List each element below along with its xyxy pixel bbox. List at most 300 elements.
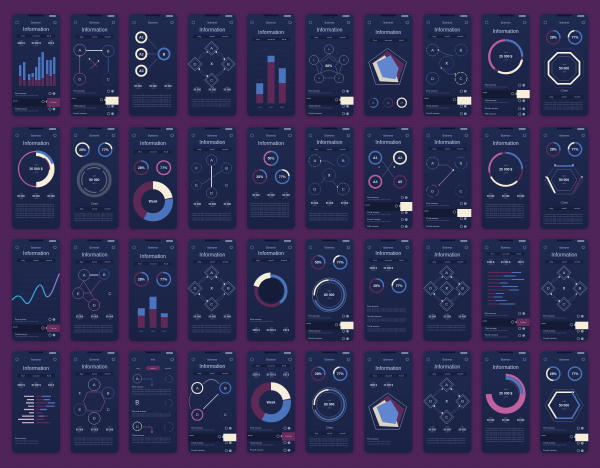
text rows: Lorem ipsum dolor sit amet consectetur adipiscing elit sed [367,328,406,330]
paragraph: Lorem ipsum dolor sit amet consectetur adipiscing elit sed [485,438,524,441]
paragraph: Lorem ipsum dolor sit amet consectetur adipiscing elit sed [485,440,524,443]
stats: + 88 % [371,270,376,272]
stats: 50 000 $ [384,267,394,270]
tabs [310,148,348,151]
paragraph: Lorem ipsum dolor sit amet consectetur adipiscing elit sed [192,328,230,331]
list: ason [13,326,18,328]
list: Lorem ipsum dolor sit amet consec [15,320,39,323]
diamond diagram: A [445,382,448,387]
tabs: day [433,262,437,264]
stats: 100 $ [283,329,290,332]
ring chart: + 28 % [503,397,509,399]
paragraph: Lorem ipsum dolor sit amet consectetur adipiscing elit sed [16,212,54,215]
stats: 50 000 [209,203,217,206]
rings [547,31,582,44]
stats [370,382,394,389]
octagon chart: Label [562,64,567,66]
text row: Lorem ipsum dolor sit amet consec [367,440,391,443]
stats: 10 000 $ [266,329,276,332]
list: Fourth season [74,112,88,115]
caption: Chart [561,200,568,204]
stats [17,193,55,200]
paragraph: Lorem ipsum dolor sit amet consectetur adipiscing elit sed [74,326,113,329]
tabs: month [104,36,111,38]
pentagon diagram: C [338,78,340,80]
tabs [252,259,290,262]
paragraph: Lorem ipsum dolor sit amet consectetur adipiscing elit sed [16,203,54,206]
stats: + 88 % [254,332,259,334]
rings: 77% [102,148,109,152]
paragraph [309,212,348,222]
tabs: week [327,37,333,39]
paragraph: Lorem ipsum dolor sit amet consectetur adipiscing elit sed [485,207,524,210]
caption: Chart [326,426,333,430]
stats: + 28 % [445,432,450,434]
stats: 50 000 [459,428,467,431]
rings: 77% [160,166,167,170]
paragraph: Lorem ipsum dolor sit amet consectetur adipiscing elit sed [132,101,171,104]
diamond diagram: B [579,286,582,291]
tabs: week [92,208,98,210]
paragraph: Lorem ipsum dolor sit amet consectetur adipiscing elit sed [544,222,582,225]
tabs: week [445,148,451,150]
tabs [76,207,114,210]
stats: + 28 % [34,198,39,200]
paragraph: Lorem ipsum dolor sit amet consectetur adipiscing elit sed [544,213,582,216]
hexagon chart: + 88 % [562,183,567,185]
list: Lorem ipsum dolor sit amet consec [485,101,508,104]
list: Fourth season [308,337,323,340]
network diagram: C [107,76,110,82]
list: Lorem ipsum dolor sit amet consec [15,110,39,112]
phone: rings with text rows [364,239,413,342]
heading: Information [199,28,225,34]
octagon chart: 50 000 [559,66,569,70]
tabs [193,372,231,375]
stats: 1000 $ [17,384,25,387]
list: First season [543,315,555,318]
stats: + 8 % [108,432,112,434]
stats: + 28 % [386,270,391,272]
stats: Label [254,327,259,329]
list: Lorem ipsum dolor sit amet consec [543,444,567,447]
stats [194,314,232,321]
network diagram: B [460,160,463,166]
phone: ring with cream arc: Business [266,246,277,250]
phone: dial with chart caption [305,351,354,454]
paragraph: Lorem ipsum dolor sit amet consectetur adipiscing elit sed [74,443,113,446]
stats [252,372,290,379]
list: First season [15,92,27,95]
paragraph: Lorem ipsum dolor sit amet consectetur adipiscing elit sed [544,108,582,111]
paragraph: Lorem ipsum dolor sit amet consectetur adipiscing elit sed [132,105,171,108]
stats: + 88 % [19,198,24,200]
list: Lorem ipsum dolor sit amet consec [308,92,332,95]
ring chart [489,153,522,186]
network diagram: C [109,291,112,296]
network diagram: B [224,386,227,390]
stats: + 8 % [49,45,54,47]
stats: 10 000 $ [501,261,511,264]
diamond diagram [188,266,235,311]
stats: 50 000 [429,316,437,318]
paragraph [192,212,230,222]
phone: octagon chart [540,14,589,117]
tabs: month [104,372,111,376]
tabs: day [315,37,319,39]
stats: 50 000 [502,419,510,422]
hexagon diagram: E [78,407,81,412]
phone: rings with dial [305,239,354,342]
list: Third season [543,442,556,445]
list: Lorem ipsum dolor sit amet consec [543,317,567,320]
stats: Label [210,201,215,203]
stats: 50 000 [209,316,217,318]
list: Lorem ipsum dolor sit amet consec [308,317,332,320]
stats [429,314,467,321]
pentagon diagram: D [318,78,320,80]
tabs: day [21,260,26,262]
stats: 100 $ [283,374,290,376]
stats: Label [195,201,200,203]
paragraph: Lorem ipsum dolor sit amet consectetur adipiscing elit sed [74,212,113,216]
paragraph: Lorem ipsum dolor sit amet consectetur adipiscing elit sed [544,220,582,223]
heading: Information [199,140,225,146]
list [306,315,354,340]
stats: + 88 % [430,432,435,434]
list: Lorem ipsum dolor sit amet consec [367,198,391,201]
step C: Third season [132,434,145,437]
paragraph: Lorem ipsum dolor sit amet consectetur adipiscing elit sed [74,439,113,442]
network diagram: A [210,157,213,162]
list: First season [426,202,438,205]
heading: Information [375,251,401,257]
tabs: week [445,36,451,38]
network diagram: D [210,190,213,195]
paragraph: Lorem ipsum dolor sit amet consectetur adipiscing elit sed [309,212,348,215]
paragraph: Lorem ipsum dolor sit amet consectetur adipiscing elit sed [427,439,465,442]
list: ason [248,435,253,437]
phone: line chart: Business [31,246,42,250]
stats: 50 000 [311,202,319,205]
text rows: Second season [367,316,382,318]
list: Lorem ipsum dolor sit amet consec [485,86,508,89]
hexagon chart [545,164,583,194]
ring chart [18,152,54,186]
stats: + 88 % [488,198,494,200]
paragraph [16,203,54,219]
list: Lorem ipsum dolor sit amet consec [426,107,450,110]
stats: + 8 % [225,206,230,208]
stats: Label [371,265,376,267]
text row [15,437,39,445]
paragraph: Lorem ipsum dolor sit amet consectetur adipiscing elit sed [192,102,230,105]
stats [194,87,232,94]
stats: Label [108,427,112,429]
stats: + 28 % [269,377,274,379]
stats [487,417,525,424]
stats: + 88 % [488,422,494,424]
tabs [310,432,348,435]
ring chart: Label [504,389,508,391]
heading: Information [434,28,460,34]
network diagram: D [93,302,96,308]
phone: diamonds with arcs [423,351,472,454]
list: ason [541,323,547,325]
bar chart: 00.03 [280,107,284,109]
stats: 50 000 [91,428,99,431]
tabs [428,147,466,150]
tabs: second [385,40,393,42]
network diagram [427,44,467,84]
stats: 50 000 [252,194,260,197]
stats: Label [284,192,289,194]
list: Fifth season [485,113,497,116]
stats: 10 000 $ [384,384,394,387]
text rows: First season [367,305,379,308]
list: Lorem ipsum dolor sit amet consec [426,219,450,222]
phone: diamonds network two [188,239,237,342]
list: Third season [543,330,556,333]
hexagon chart [545,389,583,421]
network diagram: A [78,48,81,52]
stats: 50 000 [106,428,114,431]
phone: three percent rings [246,127,296,230]
phone: connected circles ABCD [70,14,119,117]
stats: + 8 % [519,264,523,266]
tabs: month [104,260,111,264]
phone: ABCDE network [70,239,119,342]
list [306,90,354,115]
stats [487,193,525,200]
step A: A [136,376,139,381]
list: ason [424,210,430,212]
octagon chart: + 88 % [562,71,567,73]
stats: + 8 % [284,377,289,379]
paragraph: Lorem ipsum dolor sit amet consectetur adipiscing elit sed [132,98,171,101]
paragraph: Lorem ipsum dolor sit amet consectetur adipiscing elit sed [16,216,54,219]
tabs: day [315,149,319,151]
network diagram: X [328,173,331,177]
rings [547,367,582,380]
rings: 01 [372,103,375,105]
stats: 50 000 [76,316,84,318]
phone: radar with stats: Business [383,358,394,362]
paragraph: Lorem ipsum dolor sit amet consectetur adipiscing elit sed [16,205,54,208]
paragraph: Lorem ipsum dolor sit amet consectetur adipiscing elit sed [74,436,113,440]
stats: + 8 % [166,88,171,90]
list: Lorem ipsum dolor sit amet consec [543,429,567,432]
circles diagram: A1 [373,156,378,160]
heading: Information [258,30,284,36]
list: First season [485,84,497,87]
bar chart: 00.01 [139,331,143,333]
stats [252,327,290,334]
tabs: week [268,260,274,262]
stats: + 28 % [34,45,39,47]
phone: week donut with list [246,351,296,454]
paragraph: Lorem ipsum dolor sit amet consectetur adipiscing elit sed [544,103,582,106]
tabs: third [47,34,52,38]
stats: Label [460,314,465,316]
stats: + 8 % [519,198,523,200]
tabs: week [92,262,98,264]
list [540,427,588,452]
stats [134,83,172,90]
circles diagram: A4 [373,180,378,184]
list: First season [250,318,262,321]
step A: Lorem ipsum dolor sit amet consectetur adipiscing elit sed [132,388,171,391]
list: ason [541,435,547,437]
network diagram: B [342,158,345,163]
network diagram [427,157,467,197]
tabs: day [198,36,202,38]
network diagram: F [195,165,198,170]
step C: C [136,424,139,429]
heading: Information [23,366,49,372]
list [482,312,530,339]
stats: + 8 % [225,319,230,321]
radar chart [369,393,407,429]
stats [252,192,290,199]
phone: A1 A2 A4 A5 circles: Business [383,134,394,138]
paragraph: Lorem ipsum dolor sit amet consectetur adipiscing elit sed [74,217,113,220]
stats: 10 000 $ [31,384,41,387]
list: Lorem ipsum dolor sit amet consec [543,332,567,335]
stats: Label [430,314,435,316]
stats [487,259,524,266]
tabs: day [433,374,437,376]
hexagon chart: 50 000 [559,178,569,182]
phone: three stacked bars [246,14,296,117]
heading: Information [434,252,460,258]
list: Lorem ipsum dolor sit amet consec [250,320,274,323]
phone: thin ring with stats: Business [501,134,511,138]
stats: 50 000 [429,428,437,431]
phone: pentagon of circles: Business [325,22,335,24]
network diagram: E [77,291,80,296]
text row: First season [367,438,379,441]
phone: connected circles ABCD: Business [90,22,100,24]
paragraph: Lorem ipsum dolor sit amet consectetur adipiscing elit sed [192,326,230,329]
diamond diagram: A [445,270,448,275]
stats: Label [343,200,347,202]
paragraph: Lorem ipsum dolor sit amet consectetur adipiscing elit sed [74,215,113,218]
stats [17,40,55,47]
paragraph: Lorem ipsum dolor sit amet consectetur adipiscing elit sed [192,98,230,101]
dial chart: 80 000 [324,293,334,297]
stats: 1000 $ [252,329,260,332]
heading: Information [375,140,401,146]
rings: 03 [401,103,404,105]
diamond diagram [541,266,587,311]
ring chart: + 28 % [34,172,39,174]
tabs: third [517,252,522,256]
ring chart [487,375,524,412]
paragraph: Lorem ipsum dolor sit amet consectetur adipiscing elit sed [544,215,582,218]
tabs: month [457,148,464,150]
stats: 50 000 [444,428,452,431]
stats: 50 000 [444,316,452,318]
step C: Lorem ipsum dolor sit amet consectetur adipiscing elit sed [132,441,171,444]
diamond diagram: C [210,302,213,307]
stats: Label [93,427,97,429]
paragraph: Lorem ipsum dolor sit amet consectetur adipiscing elit sed [485,205,524,208]
tabs [193,260,231,264]
phone: grey ring chart [70,127,119,230]
hexagon diagram: A [93,382,96,387]
stats: Label [151,83,156,85]
hexagon diagram: F [79,390,82,395]
phone: A1 A2 A3 to B [128,14,178,117]
network diagram: A [196,386,199,390]
stats: Label [489,193,493,195]
step B: B [135,400,139,406]
paragraph: Lorem ipsum dolor sit amet consectetur adipiscing elit sed [192,105,230,108]
network diagram [189,380,231,420]
list: First season [308,315,321,318]
text rows [367,305,406,333]
heading: Information [199,252,225,258]
stats: Label [504,193,508,195]
heading: Information [375,366,401,372]
ring chart [78,164,110,196]
list: Lorem ipsum dolor sit amet consec [426,204,450,207]
tabs: third [164,262,169,266]
tabs: week [562,262,568,264]
tabs [193,148,231,151]
stats [76,427,114,434]
diamond diagram [424,266,470,311]
list: Lorem ipsum dolor sit amet consec [485,314,508,317]
tabs: month [457,372,464,376]
tabs: day [198,262,202,264]
list: Third season [74,105,86,108]
ring chart: Label [504,165,508,167]
tabs [193,35,231,38]
paragraph [485,203,524,219]
stats [311,200,349,207]
bar chart [138,297,168,333]
paragraph: Lorem ipsum dolor sit amet consectetur adipiscing elit sed [74,324,113,327]
tabs: third [282,38,287,41]
list: Third season [191,442,204,445]
list: Delete [50,101,57,104]
tabs [428,260,466,264]
tabs: month [574,260,581,264]
phone: radar chart with rings: Business [383,22,394,24]
phone: hexagon of circles: Business [207,134,218,138]
rings: 28% [138,277,145,281]
phone: circles with X hub [423,14,472,117]
tabs: month [339,36,346,39]
tabs: week [210,373,216,375]
stats: Label [19,40,24,42]
tabs: second [385,376,393,378]
phone: pentagon of circles [305,14,354,117]
paragraph [74,436,113,446]
list [70,90,118,115]
phone: wide hexagon with list: Business [559,358,570,362]
rings: 77% [337,372,344,376]
stats: Label [34,193,39,195]
stats: Label [269,372,274,374]
paragraph: Lorem ipsum dolor sit amet consectetur adipiscing elit sed [309,444,348,447]
paragraph: Lorem ipsum dolor sit amet consectetur adipiscing elit sed [485,203,524,206]
list: Lorem ipsum dolor sit amet consec [15,94,39,97]
paragraph: Lorem ipsum dolor sit amet consectetur adipiscing elit sed [16,214,54,217]
tabs: third [399,374,404,378]
